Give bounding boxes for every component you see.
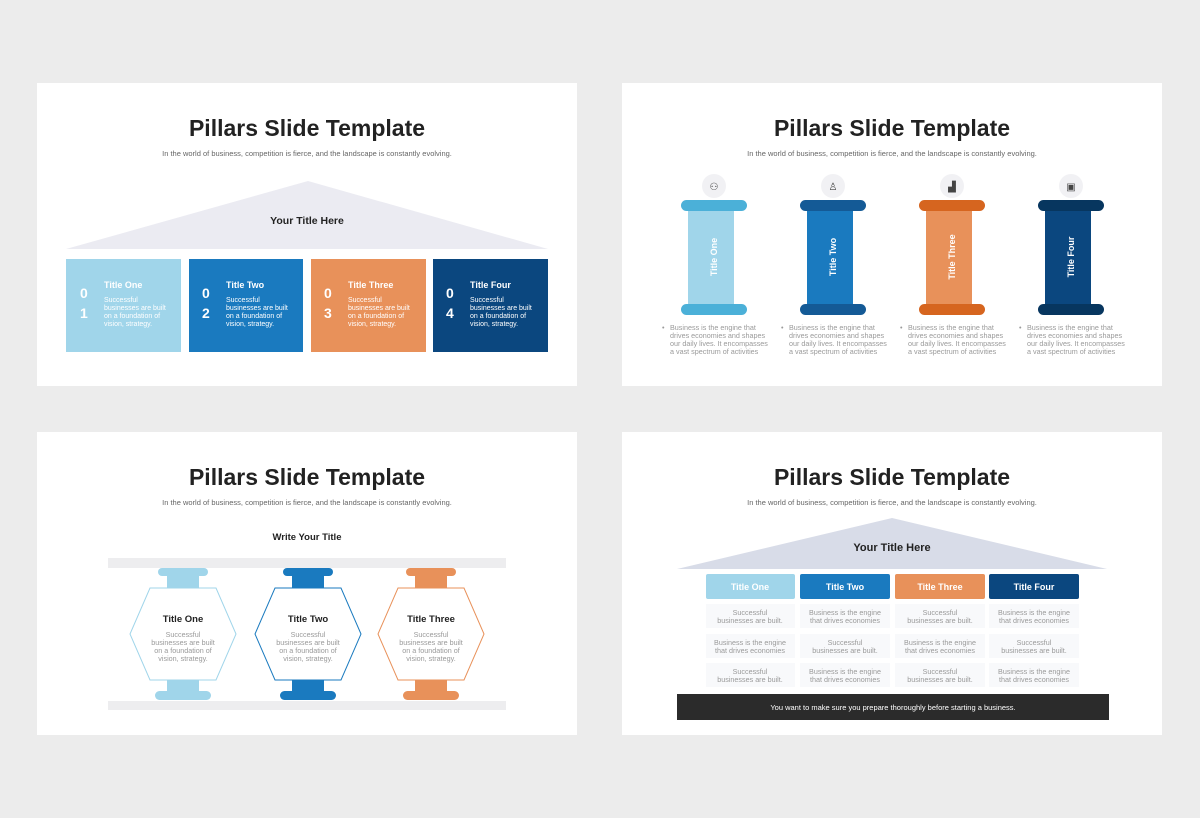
- box 01: businesses are built: [104, 305, 166, 312]
- table text: Business is the engine: [809, 608, 881, 617]
- box 02: on a foundation of: [226, 313, 282, 320]
- box 01: on a foundation of: [104, 313, 160, 320]
- hex pillar two: vision, strategy.: [283, 654, 333, 663]
- pillar one: [662, 174, 768, 356]
- table text: Successful: [733, 608, 767, 617]
- title: Pillars Slide Template: [189, 115, 425, 141]
- box 04: Title Four: [470, 280, 511, 290]
- hex pillar two: [255, 568, 361, 700]
- roof: [66, 181, 548, 249]
- pillar one: a vast spectrum of activities: [670, 347, 759, 356]
- box 03: on a foundation of: [348, 313, 404, 320]
- box 03: Title Three: [348, 280, 393, 290]
- box 03: vision, strategy.: [348, 321, 396, 328]
- table text: that drives economies: [999, 616, 1069, 625]
- box 02: 2: [202, 305, 210, 321]
- box 04: Successful: [470, 297, 504, 304]
- pillar one: our daily lives. It encompasses: [670, 339, 768, 348]
- pillar two: drives economies and shapes: [789, 331, 884, 340]
- table text: Successful: [828, 638, 862, 647]
- table text: businesses are built.: [1001, 646, 1067, 655]
- box 01: Title One: [104, 280, 142, 290]
- table text: Successful: [733, 667, 767, 676]
- hex pillar three: on a foundation of: [402, 646, 460, 655]
- subtitle: In the world of business, competition is fierce, and the landscape is constantly evolving.: [747, 149, 1037, 158]
- box 01: 0: [80, 285, 88, 301]
- box 03: Successful: [348, 297, 382, 304]
- pillar three: Title Three: [947, 234, 957, 280]
- subtitle: In the world of business, competition is fierce, and the landscape is constantly evolving.: [747, 498, 1037, 507]
- column headers: [706, 574, 1079, 599]
- roof: Your Title Here: [853, 542, 931, 554]
- subtitle: In the world of business, competition is fierce, and the landscape is constantly evolving.: [162, 149, 452, 158]
- pillar two: ♙: [829, 182, 837, 193]
- hex pillar three: Title Three: [407, 614, 455, 625]
- hex pillar three: Successful: [414, 630, 448, 639]
- panel: bottom-right house table: [622, 432, 1162, 735]
- section heading: Write Your Title: [273, 532, 341, 543]
- box 01: Successful: [104, 297, 138, 304]
- table text: businesses are built.: [717, 675, 783, 684]
- box 01: 1: [80, 305, 88, 321]
- panel: top-left house with four boxes: [37, 83, 577, 386]
- hex pillar two: businesses are built: [276, 638, 340, 647]
- roof: [677, 518, 1107, 569]
- hex pillar one: vision, strategy.: [158, 654, 208, 663]
- box 04: vision, strategy.: [470, 321, 518, 328]
- box 01: [66, 259, 181, 352]
- box 04: businesses are built: [470, 305, 532, 312]
- table text: Business is the engine: [998, 608, 1070, 617]
- footer bar: [677, 694, 1109, 720]
- box 03: 0: [324, 285, 332, 301]
- pillar one: Title One: [709, 238, 719, 276]
- box 02: Title Two: [226, 280, 265, 290]
- pillar one: Business is the engine that: [670, 323, 756, 332]
- column headers: Title Four: [1014, 582, 1055, 592]
- table text: Successful: [923, 667, 957, 676]
- table text: businesses are built.: [907, 616, 973, 625]
- roof: Your Title Here: [270, 215, 344, 227]
- pillar one: •: [662, 323, 665, 332]
- footer bar: You want to make sure you prepare thoroughly before starting a business.: [770, 703, 1016, 712]
- panel: top-right vertical pillars: [622, 83, 1162, 386]
- bottom beam: [108, 701, 506, 710]
- table text: that drives economies: [999, 675, 1069, 684]
- table text: Business is the engine: [904, 638, 976, 647]
- table text: Successful: [1017, 638, 1051, 647]
- hex pillar one: Successful: [166, 630, 200, 639]
- pillar three: drives economies and shapes: [908, 331, 1003, 340]
- pillar four: drives economies and shapes: [1027, 331, 1122, 340]
- box 02: 0: [202, 285, 210, 301]
- table text: that drives economies: [905, 646, 975, 655]
- pillar four: a vast spectrum of activities: [1027, 347, 1116, 356]
- title: Pillars Slide Template: [774, 464, 1010, 490]
- box 04: 0: [446, 285, 454, 301]
- pillar four: Title Four: [1066, 236, 1076, 277]
- pillar two: •: [781, 323, 784, 332]
- box 02: businesses are built: [226, 305, 288, 312]
- pillar four: [1019, 174, 1125, 356]
- table text: Successful: [923, 608, 957, 617]
- hex pillar one: businesses are built: [151, 638, 215, 647]
- pillar two: Title Two: [828, 237, 838, 276]
- pillar four: Business is the engine that: [1027, 323, 1113, 332]
- column headers: Title Three: [917, 582, 963, 592]
- pillar one: ⚇: [710, 182, 719, 193]
- hex pillar three: businesses are built: [399, 638, 463, 647]
- box 02: [189, 259, 303, 352]
- table text: that drives economies: [715, 646, 785, 655]
- hex pillar two: on a foundation of: [279, 646, 337, 655]
- table text: that drives economies: [810, 616, 880, 625]
- panel: bottom-left hexagon pillars: [37, 432, 577, 735]
- subtitle: In the world of business, competition is fierce, and the landscape is constantly evolving.: [162, 498, 452, 507]
- box 03: businesses are built: [348, 305, 410, 312]
- pillar two: Business is the engine that: [789, 323, 875, 332]
- box 04: 4: [446, 305, 454, 321]
- pillar four: our daily lives. It encompasses: [1027, 339, 1125, 348]
- pillar four: •: [1019, 323, 1022, 332]
- hex pillar three: vision, strategy.: [406, 654, 456, 663]
- box 02: vision, strategy.: [226, 321, 274, 328]
- column headers: Title One: [731, 582, 769, 592]
- pillar two: our daily lives. It encompasses: [789, 339, 887, 348]
- hex pillar one: on a foundation of: [154, 646, 212, 655]
- pillar three: Business is the engine that: [908, 323, 994, 332]
- box 04: on a foundation of: [470, 313, 526, 320]
- title: Pillars Slide Template: [774, 115, 1010, 141]
- pillar two: [781, 174, 887, 356]
- table text: Business is the engine: [809, 667, 881, 676]
- pillar three: a vast spectrum of activities: [908, 347, 997, 356]
- box 03: 3: [324, 305, 332, 321]
- table text: businesses are built.: [907, 675, 973, 684]
- table text: that drives economies: [810, 675, 880, 684]
- pillar four: ▣: [1066, 182, 1076, 193]
- pillar three: our daily lives. It encompasses: [908, 339, 1006, 348]
- pillar three: [900, 174, 1006, 356]
- pillar one: drives economies and shapes: [670, 331, 765, 340]
- table cells: [706, 604, 1079, 687]
- box 03: [311, 259, 426, 352]
- table text: Business is the engine: [714, 638, 786, 647]
- box 02: Successful: [226, 297, 260, 304]
- hex pillar one: Title One: [163, 614, 203, 625]
- hex pillar one: [130, 568, 236, 700]
- table text: Business is the engine: [998, 667, 1070, 676]
- box 01: vision, strategy.: [104, 321, 152, 328]
- pillar three: ▟: [947, 180, 956, 193]
- column headers: Title Two: [826, 582, 865, 592]
- top beam: [108, 558, 506, 568]
- hex pillar three: [378, 568, 484, 700]
- box 04: [433, 259, 548, 352]
- title: Pillars Slide Template: [189, 464, 425, 490]
- pillar two: a vast spectrum of activities: [789, 347, 878, 356]
- pillar three: •: [900, 323, 903, 332]
- table text: [714, 608, 1070, 684]
- hex pillar two: Successful: [291, 630, 325, 639]
- table text: businesses are built.: [812, 646, 878, 655]
- hex pillar two: Title Two: [288, 614, 328, 625]
- table text: businesses are built.: [717, 616, 783, 625]
